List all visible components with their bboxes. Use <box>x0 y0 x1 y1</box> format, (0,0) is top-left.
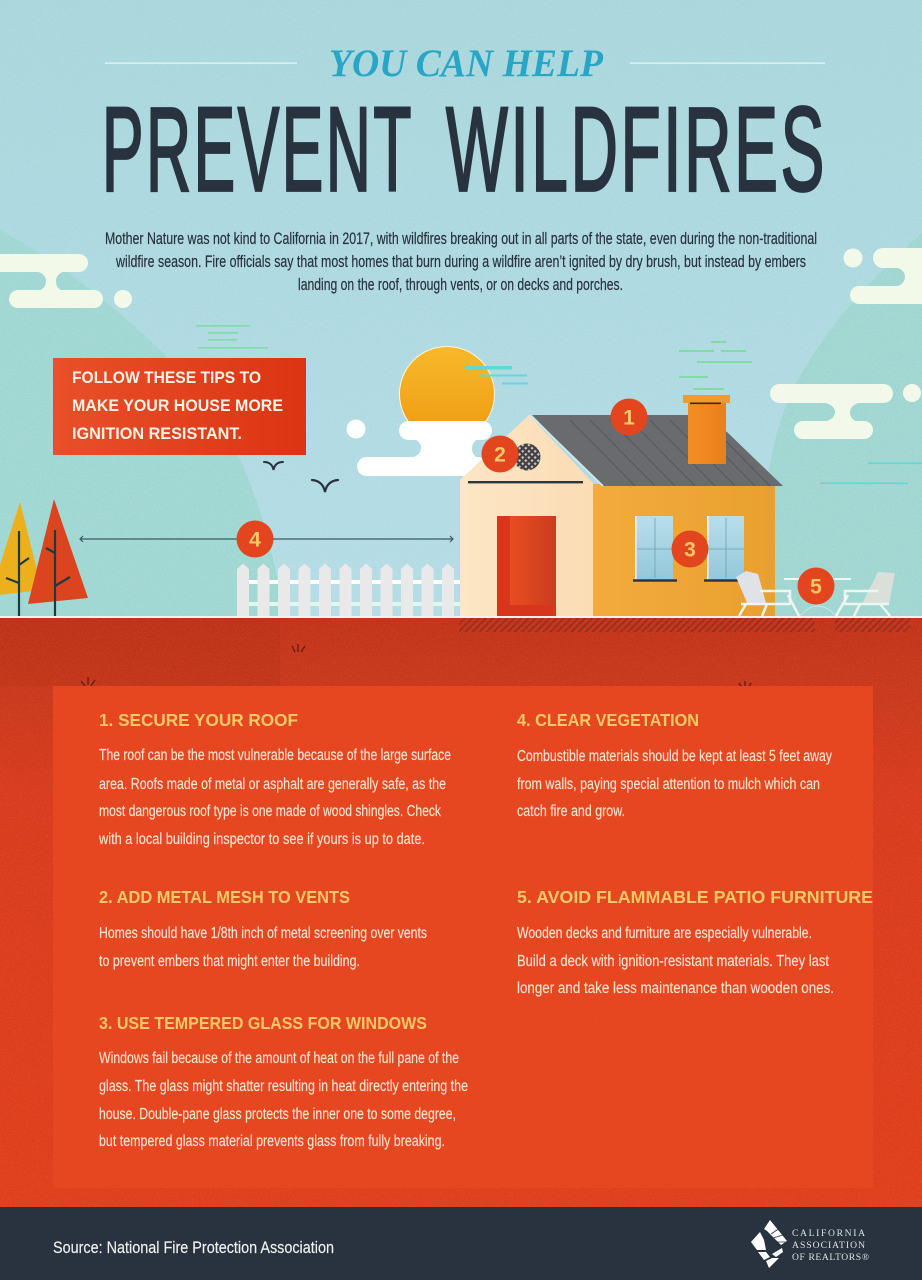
intro paragraph <box>105 230 817 294</box>
tip 4: clear vegetation: from walls, paying special attention to mulch which can <box>517 776 820 793</box>
tip 5: avoid flammable patio furniture: Build a deck with ignition-resistant materials. They last <box>517 953 830 970</box>
tip 1: secure your roof: 1. SECURE YOUR ROOF <box>99 710 298 730</box>
logo: california association of realtors: CALIFORNIA <box>792 1228 865 1239</box>
tip 5: avoid flammable patio furniture <box>517 887 873 997</box>
badge 3: 3 <box>684 538 696 562</box>
right hill <box>755 233 922 618</box>
tip 5: avoid flammable patio furniture: Wooden decks and furniture are especially vulnerable. <box>517 925 812 942</box>
tip 1: secure your roof <box>98 710 451 848</box>
cloud: top left <box>0 254 132 308</box>
tip 1: secure your roof: The roof can be the most vulnerable because of the large surface <box>99 747 451 764</box>
logo: california association of realtors: OF REALTORS® <box>792 1252 869 1263</box>
tip 3: use tempered glass for windows: but tempered glass material prevents glass from fully breaking. <box>99 1133 445 1150</box>
tip 1: secure your roof: with a local building inspector to see if yours is up to date. <box>98 831 425 848</box>
tip 4: clear vegetation: Combustible materials should be kept at least 5 feet away <box>517 748 832 765</box>
arrow: clearance distance <box>80 536 453 542</box>
callout: follow these tips: IGNITION RESISTANT. <box>72 425 242 443</box>
window left <box>633 516 677 582</box>
tip 3: use tempered glass for windows: glass. The glass might shatter resulting in heat directly entering the <box>99 1078 468 1095</box>
house front gable wall <box>460 415 593 616</box>
icon: grass tufts <box>81 644 751 688</box>
sky speckle texture <box>0 0 922 618</box>
house <box>460 395 783 616</box>
callout: follow these tips <box>53 358 306 455</box>
badge 5 <box>798 568 834 604</box>
tip 3: use tempered glass for windows <box>99 1013 468 1150</box>
vent mesh <box>514 444 540 470</box>
sun <box>400 346 528 442</box>
tip 4: clear vegetation: catch fire and grow. <box>517 803 625 820</box>
patio furniture <box>736 571 895 616</box>
roof <box>530 415 783 486</box>
badge 1 <box>610 398 648 436</box>
window right <box>704 516 744 582</box>
tip 2: add metal mesh to vents: 2. ADD METAL MESH TO VENTS <box>99 887 350 907</box>
cloud: top right <box>844 248 922 304</box>
tip 1: secure your roof: area. Roofs made of metal or asphalt are generally safe, as the <box>99 776 446 793</box>
tip 4: clear vegetation <box>517 710 832 820</box>
sky background <box>0 0 922 618</box>
logo: california association of realtors <box>751 1220 869 1268</box>
cloud: behind house <box>346 420 492 476</box>
chimney <box>683 395 730 464</box>
subtitle: you can help: YOU CAN HELP <box>329 42 604 85</box>
callout: follow these tips: MAKE YOUR HOUSE MORE <box>72 397 283 415</box>
left hill <box>0 230 285 618</box>
tip 1: secure your roof: most dangerous roof type is one made of wood shingles. Check <box>99 803 441 820</box>
intro paragraph: landing on the roof, through vents, or on decks and porches. <box>298 276 623 294</box>
tip 5: avoid flammable patio furniture: longer and take less maintenance than wooden ones. <box>517 980 834 997</box>
badge 5: 5 <box>810 576 822 598</box>
logo: california association of realtors: ASSOCIATION <box>792 1240 865 1251</box>
icon: trees <box>0 499 88 616</box>
tip 2: add metal mesh to vents: Homes should have 1/8th inch of metal screening over vents <box>99 925 427 942</box>
tip 3: use tempered glass for windows: 3. USE TEMPERED GLASS FOR WINDOWS <box>99 1013 427 1033</box>
tip 2: add metal mesh to vents: to prevent embers that might enter the building. <box>99 953 360 970</box>
footer bar <box>0 1207 922 1280</box>
house side wall <box>593 484 775 616</box>
tip 5: avoid flammable patio furniture: 5. AVOID FLAMMABLE PATIO FURNITURE <box>517 887 873 907</box>
source line: Source: National Fire Protection Association <box>53 1239 334 1257</box>
wind lines <box>196 325 922 484</box>
panel: tips <box>53 686 873 1188</box>
tip 3: use tempered glass for windows: Windows fail because of the amount of heat on the full pane of the <box>99 1050 459 1067</box>
tip 2: add metal mesh to vents <box>99 887 427 970</box>
tip 4: clear vegetation: 4. CLEAR VEGETATION <box>517 710 699 730</box>
badge 1: 1 <box>623 406 635 430</box>
badge 4: 4 <box>249 528 261 552</box>
callout: follow these tips: FOLLOW THESE TIPS TO <box>72 369 261 387</box>
title: prevent wildfires: PREVENT <box>102 82 414 216</box>
badge 2 <box>482 436 518 472</box>
tip 3: use tempered glass for windows: house. Double-pane glass protects the inner one to some degree, <box>99 1106 456 1123</box>
ground <box>0 616 922 1208</box>
cloud: right middle <box>770 384 921 439</box>
gable divider line <box>468 481 583 483</box>
badge 2: 2 <box>494 444 506 466</box>
badge 3 <box>672 530 708 568</box>
badge 4 <box>236 520 274 558</box>
door <box>497 516 556 616</box>
fence <box>237 564 460 616</box>
icon: birds <box>264 462 338 492</box>
